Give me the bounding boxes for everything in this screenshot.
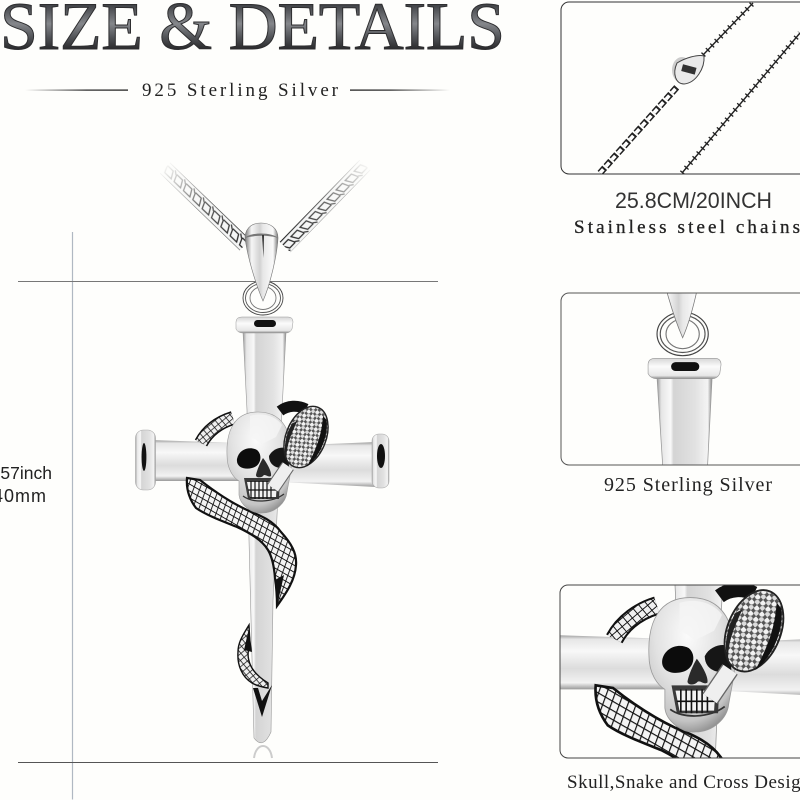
chain material caption: Stainless steel chains — [574, 217, 800, 238]
panel: bail and ring detail — [560, 292, 800, 466]
panel: chains — [561, 2, 800, 174]
subtitle with rules: 925 Sterling Silver — [142, 80, 339, 101]
dimension label — [0, 463, 52, 506]
chain — [163, 163, 367, 247]
pendant: skull, snake and nail cross — [136, 223, 389, 743]
reflection of pendant tip — [254, 746, 272, 758]
chain detail — [600, 3, 800, 173]
panel: skull and snake detail — [560, 584, 800, 758]
dimension lines — [18, 232, 438, 800]
zoomed skull — [560, 586, 800, 758]
chain length caption: 25.8CM/20INCH — [615, 188, 772, 213]
material caption: 925 Sterling Silver — [604, 474, 772, 496]
zoomed top of cross — [648, 294, 722, 464]
